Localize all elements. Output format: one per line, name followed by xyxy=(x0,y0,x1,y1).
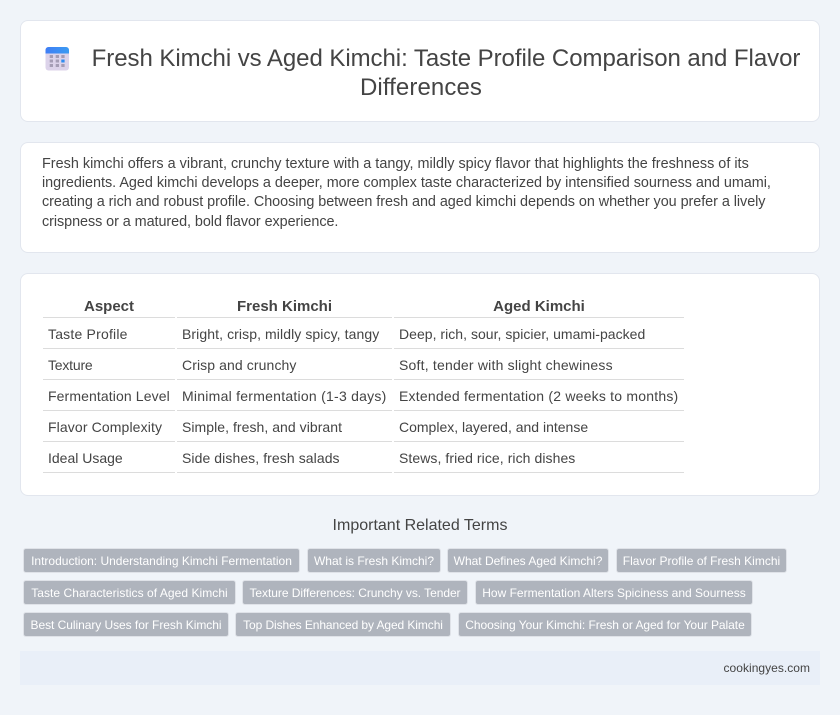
title: Fresh Kimchi vs Aged Kimchi: Taste Profile Comparison and Flavor xyxy=(92,45,800,72)
row: texture: Crisp and crunchy xyxy=(182,357,297,373)
row: texture: Soft, tender with slight chewiness xyxy=(399,357,613,373)
heading: important related terms: Important Related Terms xyxy=(333,517,507,534)
tag xyxy=(23,548,300,573)
row: fermentation level: Fermentation Level xyxy=(48,388,170,404)
comparison table xyxy=(43,298,684,473)
tag xyxy=(235,612,451,637)
row: taste profile: Bright, crisp, mildly spicy, tangy xyxy=(182,326,379,342)
row: ideal usage: Side dishes, fresh salads xyxy=(182,450,340,466)
text block: introduction: ingredients. Aged kimchi develops a deeper, more complex taste characterized by intensified sourness and umami, xyxy=(42,175,771,191)
row: flavor complexity: Simple, fresh, and vibrant xyxy=(182,419,342,435)
title: Differences xyxy=(360,74,482,101)
related terms tags xyxy=(23,548,787,637)
footer bar xyxy=(20,651,820,685)
tag: Top Dishes Enhanced by Aged Kimchi xyxy=(243,618,443,632)
tag: Taste Characteristics of Aged Kimchi xyxy=(31,586,228,600)
tag: Choosing Your Kimchi: Fresh or Aged for Your Palate xyxy=(465,618,745,632)
text block: introduction: crispness or a matured, bold flavor experience. xyxy=(42,214,338,230)
panel: comparison table xyxy=(20,273,820,496)
tag: Introduction: Understanding Kimchi Fermentation xyxy=(31,554,292,568)
title xyxy=(92,45,800,101)
row: fermentation level xyxy=(48,388,678,404)
tag xyxy=(447,548,609,573)
tag: Texture Differences: Crunchy vs. Tender xyxy=(249,586,461,600)
row: fermentation level: Extended fermentation (2 weeks to months) xyxy=(399,388,678,404)
tag: What is Fresh Kimchi? xyxy=(314,554,434,568)
row: taste profile: Taste Profile xyxy=(48,326,128,342)
row: ideal usage: Ideal Usage xyxy=(48,450,123,466)
table header row: Aged Kimchi xyxy=(493,298,585,315)
panel: intro paragraph xyxy=(20,142,820,253)
tag: What Defines Aged Kimchi? xyxy=(454,554,602,568)
row: flavor complexity: Complex, layered, and intense xyxy=(399,419,588,435)
row: taste profile xyxy=(48,326,645,342)
footer source text: cookingyes.com xyxy=(724,661,810,675)
tag xyxy=(242,580,468,605)
table header row: Fresh Kimchi xyxy=(237,298,332,315)
text block: introduction: Fresh kimchi offers a vibrant, crunchy texture with a tangy, mildly spicy flavor that highlights the freshness of its xyxy=(42,156,749,172)
panel: title header xyxy=(20,20,820,122)
row: texture xyxy=(48,357,613,373)
text block: introduction xyxy=(42,156,771,230)
row: flavor complexity: Flavor Complexity xyxy=(48,419,162,435)
row: taste profile: Deep, rich, sour, spicier, umami-packed xyxy=(399,326,645,342)
table header row: Aspect xyxy=(84,298,134,315)
row: fermentation level: Minimal fermentation (1-3 days) xyxy=(182,388,387,404)
tag xyxy=(616,548,787,573)
tag xyxy=(458,612,752,637)
tag xyxy=(23,612,229,637)
row: ideal usage: Stews, fried rice, rich dishes xyxy=(399,450,575,466)
table header row xyxy=(84,298,585,315)
tag: Best Culinary Uses for Fresh Kimchi xyxy=(30,618,221,632)
row: texture: Texture xyxy=(48,357,93,373)
tag xyxy=(307,548,441,573)
text block: introduction: creating a rich and robust profile. Choosing between fresh and aged kimchi depends on whether you prefer a lively xyxy=(42,194,765,210)
tag xyxy=(23,580,236,605)
tag xyxy=(475,580,753,605)
icon: calendar xyxy=(46,47,69,70)
tag: Flavor Profile of Fresh Kimchi xyxy=(623,554,780,568)
tag: How Fermentation Alters Spiciness and Sourness xyxy=(482,586,746,600)
row: ideal usage xyxy=(48,450,575,466)
row: flavor complexity xyxy=(48,419,588,435)
